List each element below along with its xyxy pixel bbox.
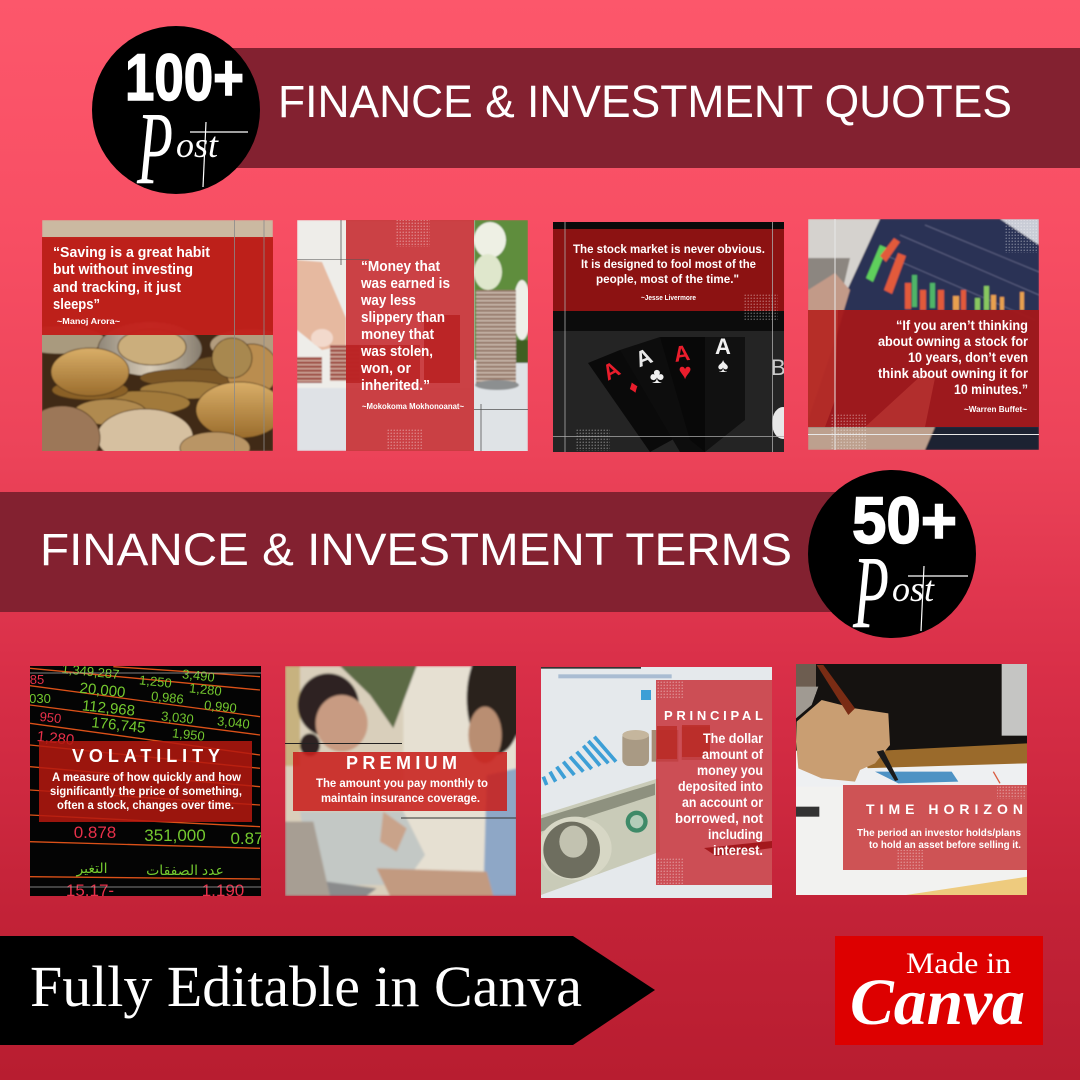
photo: stock ticker board: عدد الصفقات [146,862,224,878]
header banner: quotes [230,48,1080,168]
quote text: It is designed to fool most of the [581,257,756,271]
badge: 50+ post [808,470,976,650]
photo: aces playing cards: ♥ [678,359,692,384]
panel: quote card money [297,220,531,453]
photo: aces playing cards: B [771,355,786,380]
quote text: money that [361,327,434,343]
photo: two people talking [285,666,516,896]
term text: PRINCIPAL [664,708,763,723]
quote text [53,245,210,326]
quote text [878,318,1029,414]
photo: stock ticker board: 3,040 [217,713,250,732]
quote text: about owning a stock for [878,334,1029,349]
dark red quote band [553,229,784,311]
term text: The dollar [703,731,764,746]
photo: stock ticker board: 15.17- [66,881,114,900]
badge: 100+ post [92,26,260,206]
heading: finance and investment quotes: FINANCE & INVESTMENT QUOTES [278,76,1012,127]
photo: stock ticker board: 20,000 [79,680,126,701]
photo: stock ticker board: 1,349,287 [61,661,120,682]
photo: stock ticker board: 112,968 [81,697,136,720]
quote text: won, or [360,361,411,377]
photo: stock ticker board: 0,990 [204,697,237,716]
term text: deposited into [678,779,763,794]
badge: 100+ post: ost [176,125,219,165]
term text: often a stock, changes over time. [57,798,234,812]
red quote band [808,310,1039,427]
photo: gold coins [42,220,273,451]
quote text: ~Warren Buffet~ [964,405,1027,414]
photo: stock ticker board: 85 [30,672,44,687]
badge: 50+ post: ost [892,569,935,609]
term text: The period an investor holds/plans [857,827,1021,839]
term text: amount of [702,747,763,762]
badge: 50+ post: 50+ [852,483,957,557]
photo: aces playing cards: A [598,356,624,385]
quote text: but without investing [53,262,193,278]
quote text: people, most of the time." [596,272,739,286]
photo: stock ticker board: 0,986 [151,688,184,707]
arrow banner: fully editable in canva [0,936,655,1045]
quote text: “Saving is a great habit [53,245,210,261]
photo: aces playing cards: A [715,334,731,359]
term text [857,801,1023,851]
panel: term card volatility [29,661,264,900]
photo: stock ticker board: 351,000 [144,826,206,845]
panel: term card time horizon [796,664,1028,896]
quote text: ~Manoj Arora~ [57,317,120,326]
photo: aces playing cards: A [632,343,656,372]
quote text: “Money that [361,259,440,275]
term text: an account or [682,795,764,810]
photo: dollar bill and coins on report [538,667,773,899]
header banner: terms [0,492,840,612]
photo: stock ticker board: 1,280 [189,680,222,699]
term text: PREMIUM [346,753,457,773]
term text: significantly the price of something, [50,784,242,798]
photo: hand stacking coins [297,220,531,453]
term text: money you [697,763,763,778]
photo: stock ticker board [29,661,264,900]
term text [316,753,488,805]
photo: hand with fountain pen [796,664,1028,896]
logo: made in canva: Made in [906,947,1011,980]
term text: including [708,827,763,842]
logo: made in canva [835,936,1043,1045]
quote text: 10 years, don’t even [908,350,1028,365]
panel: quote card stock market [553,222,794,452]
quote text: was stolen, [360,344,433,360]
quote text: way less [360,293,416,309]
panel: quote card saving [42,220,273,451]
quote text: and tracking, it just [53,280,181,296]
photo: stock ticker board: 0.87 [230,829,264,848]
red quote band [42,237,273,335]
quote text [573,242,765,302]
term text: maintain insurance coverage. [321,791,480,805]
badge: 50+ post: P [852,535,889,650]
quote text [360,259,464,411]
photo: stock ticker board: 1,280 [36,728,75,749]
photo: stock ticker board: 1,250 [139,672,172,691]
panel: term card principal [538,667,773,899]
quote text: inherited.” [361,378,430,394]
photo: stock ticker board: 0.878 [74,823,116,842]
quote text: sleeps” [53,297,100,313]
arrow banner: fully editable in canva: Fully Editable in Canva [30,954,582,1019]
term text: borrowed, not [675,811,763,826]
photo: aces playing cards: A [672,340,692,367]
quote text: 10 minutes.” [954,382,1028,397]
photo: aces playing cards: ♦ [626,376,641,398]
translucent red panel [656,680,772,885]
quote text: was earned is [360,276,450,292]
quote text: The stock market is never obvious. [573,242,765,256]
term text: interest. [713,843,763,858]
translucent red panel [843,785,1027,870]
term text: to hold an asset before selling it. [869,839,1021,851]
badge: 100+ post: P [136,91,173,206]
term text: TIME HORIZON [866,801,1023,817]
photo: stock ticker board: 176,745 [91,714,146,737]
quote text: ~Mokokoma Mokhonoanat~ [362,402,464,411]
panel: quote card owning a stock [808,219,1039,450]
panel: term card premium [285,666,516,896]
heading: finance and investment terms: FINANCE & INVESTMENT TERMS [40,524,792,575]
quote text: ~Jesse Livermore [641,293,696,302]
photo: stock ticker board: التغير [75,860,108,877]
translucent red panel [346,220,474,451]
translucent red box [293,752,507,811]
term text [664,708,764,858]
term text: VOLATILITY [72,746,220,766]
photo: stock ticker board: 1,950 [172,725,205,744]
photo: stock ticker board: 3,490 [182,666,215,685]
logo: made in canva: Canva [850,966,1025,1039]
photo: stock ticker board: 030 [29,691,51,706]
photo: aces playing cards: ♠ [718,355,729,377]
badge: 100+ post: 100+ [125,40,244,114]
translucent red box [39,741,252,822]
term text [50,746,242,812]
photo: stock ticker board: 3,030 [161,708,194,727]
term text: A measure of how quickly and how [52,770,242,784]
quote text: think about owning it for [878,366,1029,381]
photo: stock ticker board: 1,190 [202,881,244,900]
term text: The amount you pay monthly to [316,776,488,790]
photo: tablet stock chart [808,219,1039,450]
photo: aces playing cards: ♣ [650,363,664,388]
quote text: slippery than [361,310,445,326]
quote text: “If you aren’t thinking [896,318,1028,333]
photo: aces playing cards [553,222,794,452]
photo: stock ticker board: 950 [39,709,62,726]
